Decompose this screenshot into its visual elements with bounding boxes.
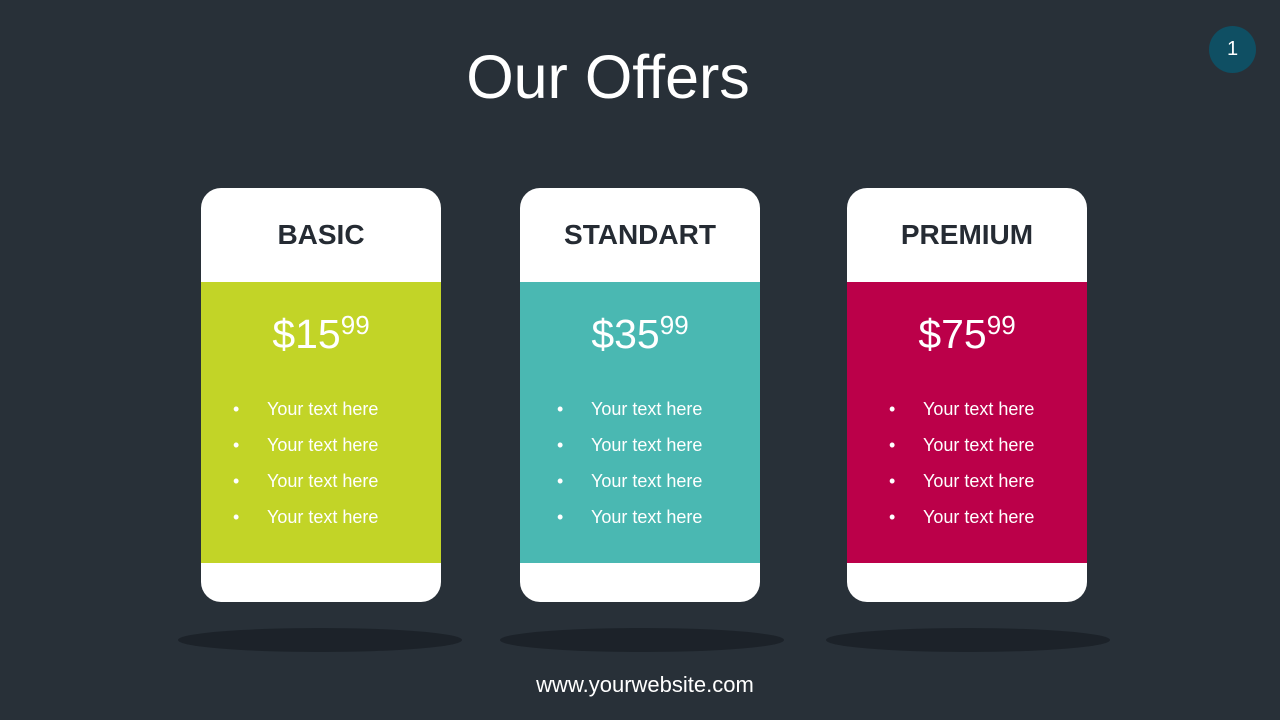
price block: standart: Your text here	[591, 399, 702, 419]
price block: standart: •	[557, 507, 563, 527]
title: Our Offers	[466, 43, 750, 111]
price block: standart	[520, 282, 760, 563]
price block: standart: •	[557, 435, 563, 455]
panel: standart	[520, 188, 760, 602]
page number badge	[1209, 26, 1256, 73]
price block: standart: $3599	[591, 310, 689, 357]
price block: premium: $7599	[918, 310, 1016, 357]
price block: premium: Your text here	[923, 471, 1034, 491]
panel: basic	[201, 188, 441, 602]
heading: standart: STANDART	[564, 219, 716, 250]
price block: basic: Your text here	[267, 399, 378, 419]
price block: premium: Your text here	[923, 507, 1034, 527]
price block: premium: •	[889, 471, 895, 491]
price block: premium: Your text here	[923, 399, 1034, 419]
price block: basic: •	[233, 507, 239, 527]
price block: standart: •	[557, 471, 563, 491]
panel: premium	[847, 188, 1087, 602]
price block: standart: •	[557, 399, 563, 419]
heading: premium: PREMIUM	[901, 219, 1033, 250]
price block: basic	[201, 282, 441, 563]
price block: premium	[847, 282, 1087, 563]
price block: premium: Your text here	[923, 435, 1034, 455]
price block: basic: •	[233, 399, 239, 419]
price block: standart: Your text here	[591, 471, 702, 491]
price block: basic: $1599	[272, 310, 370, 357]
price block: premium: •	[889, 507, 895, 527]
price block: standart: Your text here	[591, 435, 702, 455]
price block: basic: Your text here	[267, 435, 378, 455]
price block: basic: •	[233, 435, 239, 455]
shadow: basic	[178, 628, 462, 652]
heading: basic: BASIC	[277, 219, 365, 250]
price block: basic: •	[233, 471, 239, 491]
shadow: premium	[826, 628, 1110, 652]
price block: standart: Your text here	[591, 507, 702, 527]
page number badge: 1	[1227, 38, 1238, 60]
footer website: www.yourwebsite.com	[536, 672, 754, 697]
shadow: standart	[500, 628, 784, 652]
price block: basic: Your text here	[267, 471, 378, 491]
price block: premium: •	[889, 435, 895, 455]
price block: basic: Your text here	[267, 507, 378, 527]
price block: premium: •	[889, 399, 895, 419]
